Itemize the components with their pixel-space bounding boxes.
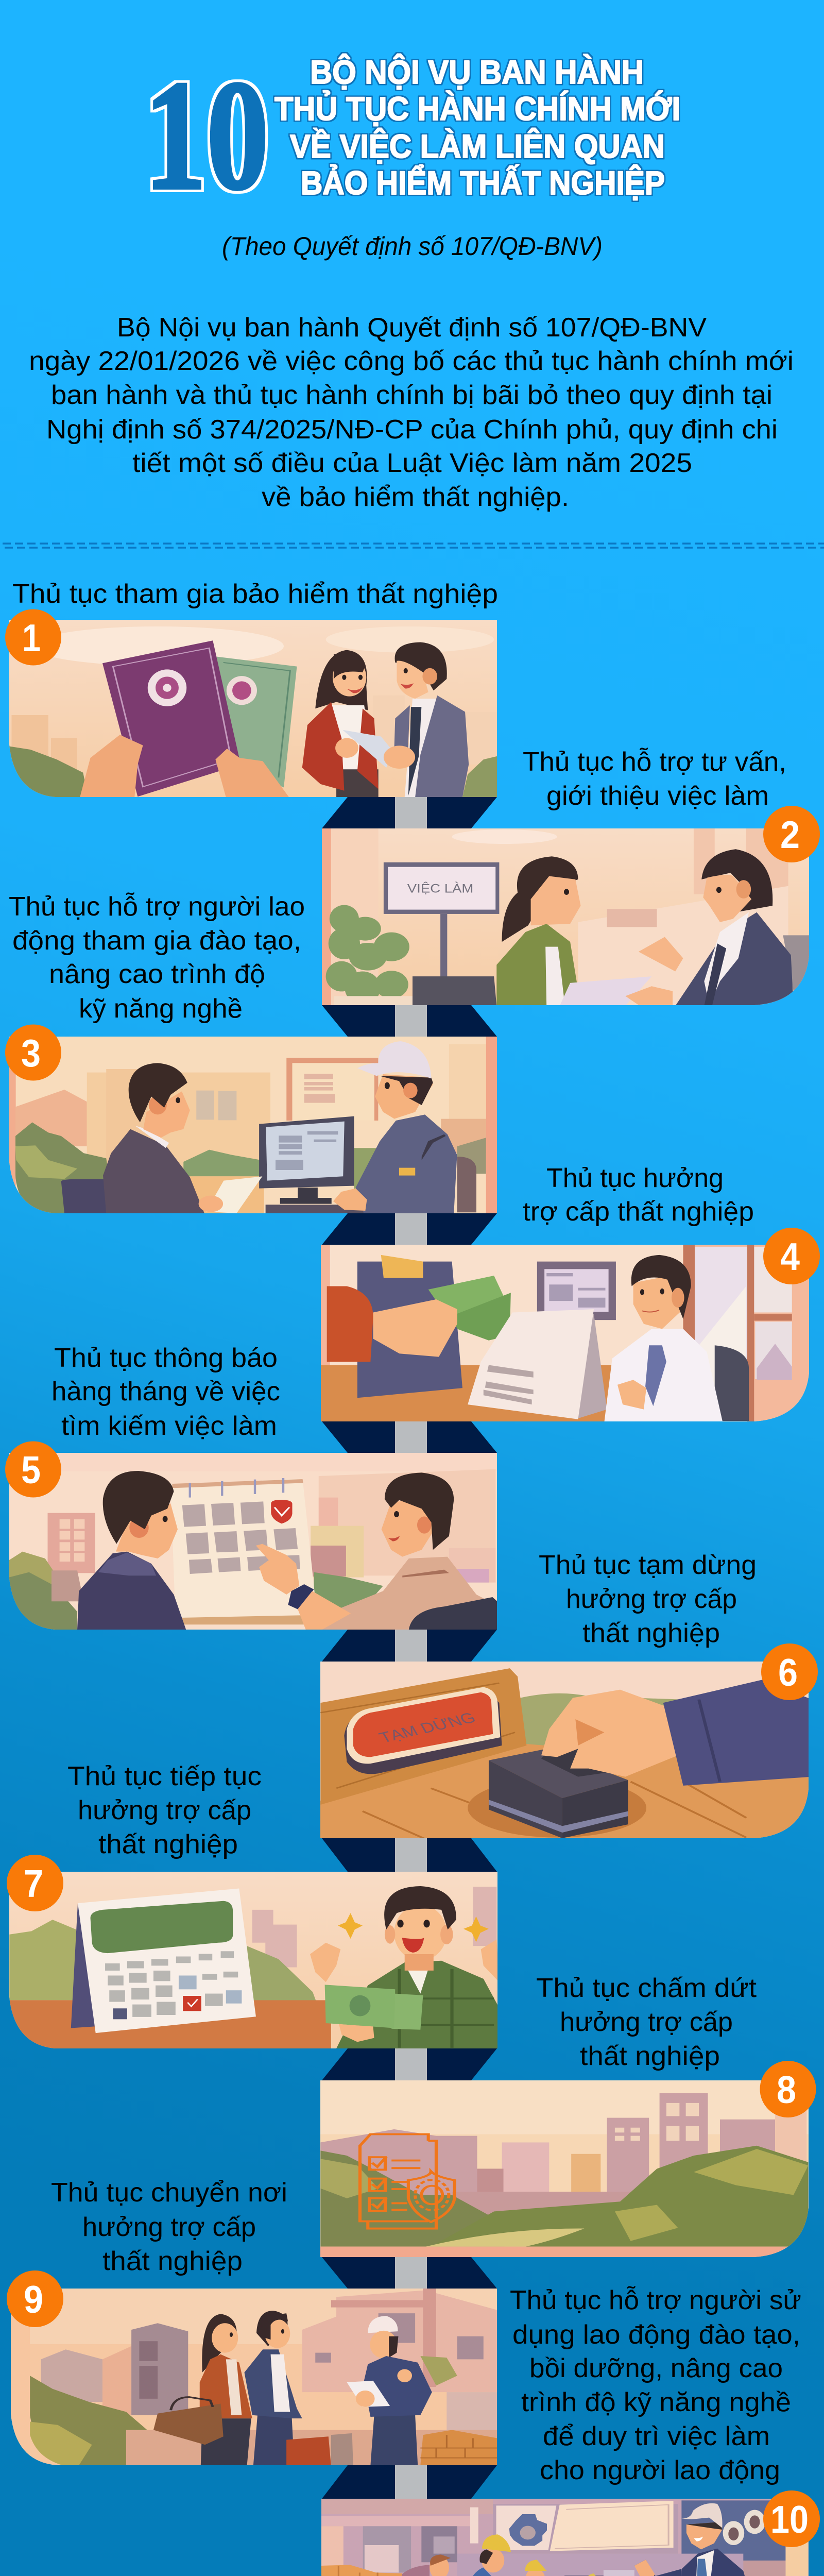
title block (144, 48, 680, 222)
connectors between panels (322, 797, 497, 2499)
step 3 label: động tham gia đào tạo, (12, 926, 301, 956)
desk (319, 1365, 662, 1421)
badge 4 (763, 1228, 820, 1284)
step 5 label: hàng tháng về việc (52, 1377, 280, 1406)
trees (9, 1552, 55, 1630)
badge 2 (763, 806, 820, 862)
step 4 label: Thủ tục hưởng (546, 1163, 724, 1193)
step 9 label: Thủ tục chuyển nơi (51, 2178, 287, 2208)
intro paragraph: tiết một số điều của Luật Việc làm năm 2025 (132, 448, 692, 478)
badge 4: 4 (780, 1235, 800, 1278)
bricks (321, 2565, 402, 2576)
badge 8 (760, 2061, 816, 2117)
step 3 label: nâng cao trình độ (49, 959, 265, 989)
document (575, 1314, 607, 1419)
step 9 label: thất nghiệp (102, 2246, 243, 2276)
seated man (103, 1129, 204, 1213)
monitor (259, 1116, 354, 1189)
panel 1: social insurance books and two people (8, 619, 499, 798)
step 4 label: trợ cấp thất nghiệp (523, 1197, 754, 1227)
handbag (153, 2403, 224, 2445)
step 4 label (523, 1163, 754, 1227)
panel 8: city with checklist icon (318, 2078, 812, 2260)
sign board (493, 2504, 678, 2554)
step 10 label: để duy trì việc làm (543, 2421, 770, 2451)
money and hand (428, 1276, 510, 1316)
panel 4: receiving unemployment benefit (319, 1244, 811, 1422)
calendar (170, 1479, 317, 1619)
title text: BẢO HIỂM THẤT NGHIỆP (301, 164, 665, 201)
subtitle: (Theo Quyết định số 107/QĐ-BNV) (222, 232, 603, 261)
badge 8: 8 (777, 2068, 796, 2111)
trees (320, 2150, 505, 2247)
right building (681, 2500, 785, 2561)
step 6 label: Thủ tục tạm dừng (539, 1550, 757, 1580)
hand and sleeve (541, 1690, 678, 1777)
intro paragraph (29, 313, 794, 512)
wall frame (537, 1262, 616, 1320)
woman (502, 856, 578, 942)
step 2 label: giới thiệu việc làm (546, 781, 769, 811)
title text: THỦ TỤC HÀNH CHÍNH MỚI (274, 90, 680, 127)
step 7 label: hưởng trợ cấp (78, 1795, 251, 1825)
man (395, 642, 447, 690)
man (336, 1961, 497, 2048)
step 10 label: bồi dưỡng, nâng cao (529, 2353, 783, 2383)
woman (202, 2314, 237, 2372)
fists (310, 1939, 499, 1982)
calendar (71, 1903, 97, 2028)
panel 10: training workers at a construction site (321, 2498, 812, 2576)
badge 3: 3 (21, 1031, 41, 1075)
step 7 label (67, 1761, 262, 1859)
paper (206, 1176, 262, 1213)
purple book (102, 640, 241, 796)
gear (509, 2514, 547, 2546)
step 6 label: hưởng trợ cấp (566, 1584, 737, 1614)
badge 3 (5, 1024, 61, 1081)
badge 1: 1 (22, 616, 41, 659)
intro paragraph: về bảo hiểm thất nghiệp. (262, 482, 569, 512)
badge 6 (761, 1643, 818, 1700)
step 7 label: Thủ tục tiếp tục (67, 1761, 262, 1791)
engineer (678, 2549, 751, 2576)
intro paragraph: Nghị định số 374/2025/NĐ-CP của Chính phủ, quy định chi (46, 415, 778, 445)
panel 9: relocating workers and foreman (8, 2287, 499, 2468)
trees and ground (30, 2376, 147, 2465)
step 5 label (52, 1343, 280, 1441)
step 8 label (536, 1973, 757, 2071)
panel 2: job consultation: VIỆC LÀM (407, 881, 473, 895)
man (701, 849, 772, 912)
step 5 label: Thủ tục thông báo (54, 1343, 278, 1373)
green book (216, 657, 297, 787)
step 6 label (539, 1550, 757, 1648)
stamp (489, 1749, 628, 1798)
paper and hands (342, 730, 393, 768)
pointing hand (256, 1544, 299, 1595)
step 10 label: trình độ kỹ năng nghề (521, 2387, 791, 2417)
step 5 label: tìm kiếm việc làm (61, 1411, 277, 1441)
step 8 label: thất nghiệp (580, 2041, 720, 2071)
desk (318, 1744, 812, 1841)
panel 5: monthly job search calendar (8, 1452, 497, 1631)
step 3 label: Thủ tục hỗ trợ người lao (9, 892, 305, 922)
step 9 label (51, 2178, 287, 2276)
sign (384, 862, 499, 914)
title text: VỀ VIỆC LÀM LIÊN QUAN (290, 127, 665, 165)
intro paragraph: Bộ Nội vụ ban hành Quyết định số 107/QĐ-BNV (117, 313, 707, 343)
folder (357, 1262, 462, 1398)
trees (15, 1122, 109, 1213)
intro paragraph: ban hành và thủ tục hành chính bị bãi bỏ theo quy định tại (51, 380, 772, 410)
worker (457, 1157, 476, 1212)
hands (80, 735, 143, 797)
badge 5: 5 (21, 1448, 41, 1492)
badge 5 (5, 1442, 61, 1497)
plant (326, 905, 409, 1004)
panel 2: job consultation (320, 827, 812, 1008)
panel 7: resuming benefit with calendar and money (8, 1870, 499, 2051)
badge 2: 2 (780, 813, 800, 856)
badge 9: 9 (24, 2278, 43, 2321)
badge 9 (7, 2270, 63, 2327)
intro paragraph: ngày 22/01/2026 về việc công bố các thủ tục hành chính mới (29, 346, 794, 376)
badge 10: 10 (770, 2498, 809, 2541)
clerk (715, 1345, 749, 1421)
badge 10 (763, 2490, 820, 2547)
stars (338, 1913, 363, 1939)
step 8 label: Thủ tục chấm dứt (536, 1973, 757, 2003)
right man jacket and chair (322, 1557, 495, 1630)
step 3 label: kỹ năng nghề (79, 994, 243, 1024)
step 8 label: hưởng trợ cấp (560, 2007, 733, 2037)
big number 10: 10 (144, 48, 269, 222)
woman (315, 650, 368, 710)
step 7 label: thất nghiệp (98, 1829, 238, 1859)
step 10 label: dụng lao động đào tạo, (512, 2320, 800, 2350)
step 10 label (510, 2285, 801, 2485)
step 2 label: Thủ tục hỗ trợ tư vấn, (523, 747, 786, 777)
title text: BỘ NỘI VỤ BAN HÀNH (310, 53, 644, 91)
bricks (420, 2430, 497, 2465)
panel 6: pause stamp (318, 1660, 812, 1841)
badge 7: 7 (24, 1862, 43, 1905)
step 9 label: hưởng trợ cấp (82, 2212, 256, 2242)
badge 1 (5, 609, 61, 666)
man with suitcase (256, 2311, 287, 2346)
badge 6: 6 (778, 1651, 798, 1694)
step 10 label: Thủ tục hỗ trợ người sử (510, 2285, 801, 2315)
title text (274, 53, 680, 201)
panel 3: job training registration at desk (8, 1036, 497, 1215)
step 1 label: Thủ tục tham gia bảo hiểm thất nghiệp (12, 579, 498, 609)
foreman (368, 2316, 398, 2333)
left man (77, 1552, 186, 1630)
icon: checklist with gear and shield (360, 2134, 455, 2229)
step 10 label: cho người lao động (540, 2455, 780, 2485)
desk and chair (186, 1176, 264, 1213)
step 2 label (523, 747, 786, 811)
wood sign (320, 1668, 526, 1805)
badge 7 (7, 1855, 63, 1911)
money (391, 1994, 423, 2030)
step 3 label (9, 892, 305, 1024)
step 6 label: thất nghiệp (582, 1618, 720, 1648)
panel 6: pause stamp: TẠM DỪNG (376, 1709, 478, 1745)
